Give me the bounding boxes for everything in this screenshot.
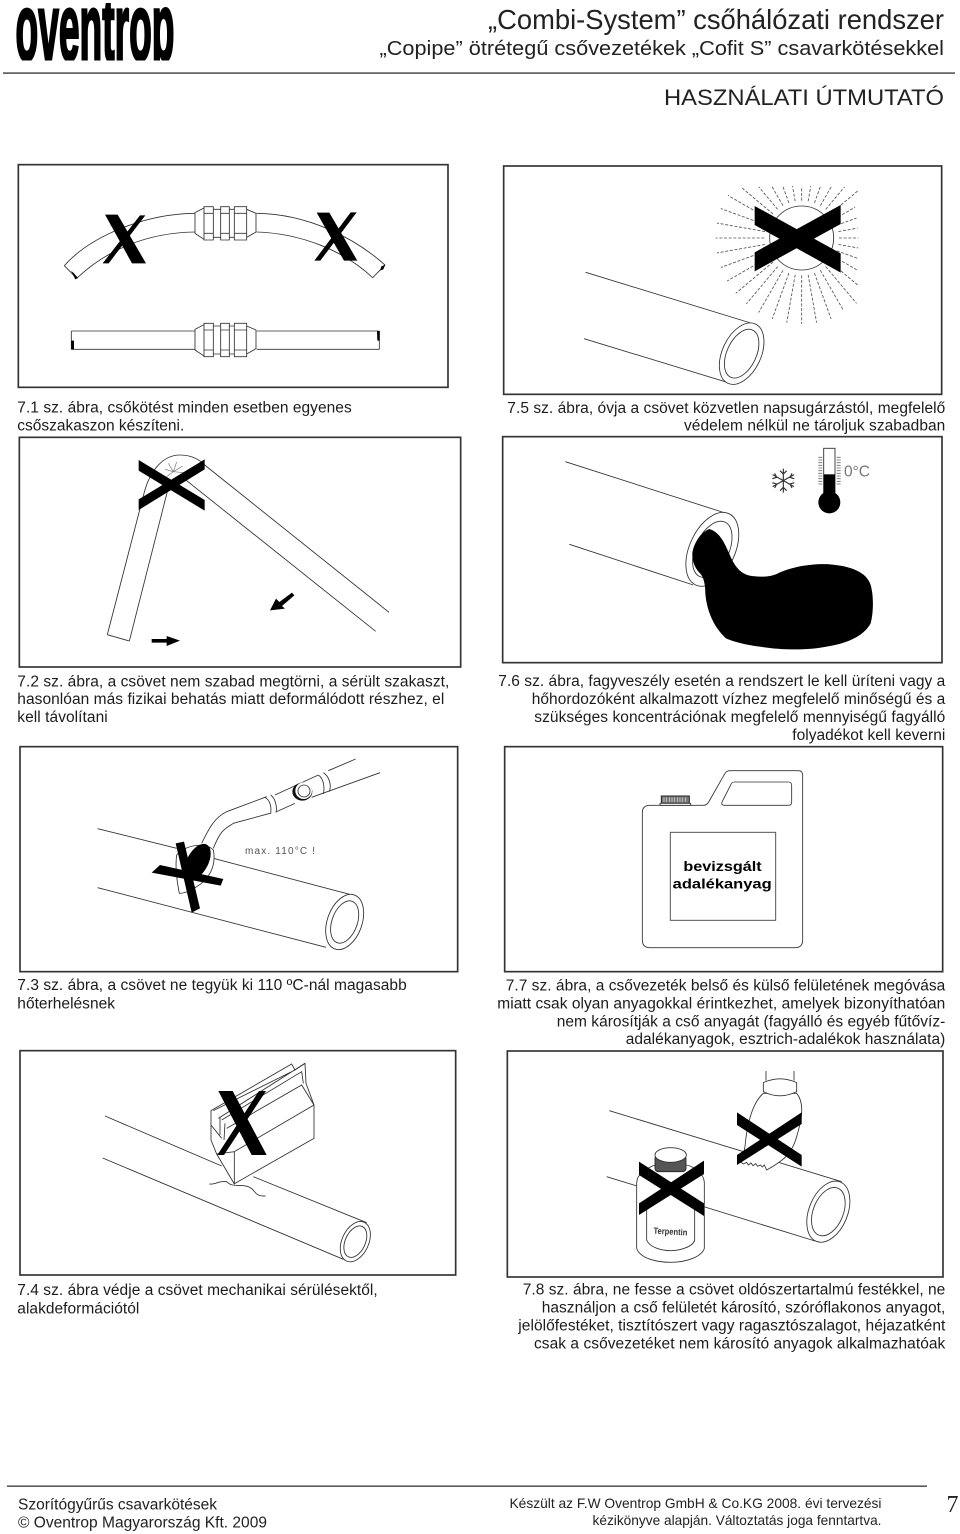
caption 7.8: csak a csővezetéket nem károsító anyagok alkalmazhatóak	[534, 1335, 946, 1352]
caption 7.2: hasonlóan más fizikai behatás miatt deformálódott részhez, el	[17, 691, 444, 708]
caption 7.1: csőszakaszon készíteni.	[17, 418, 184, 434]
caption 7.6: 7.6 sz. ábra, fagyveszély esetén a rendszert le kell üríteni vagy a	[498, 673, 946, 690]
X mark left	[103, 215, 146, 263]
caption 7.5: 7.5 sz. ábra, óvja a csövet közvetlen napsugárzástól, megfelelő	[507, 400, 945, 417]
pipe	[607, 1111, 858, 1249]
caption 7.3: hőterhelésnek	[17, 995, 115, 1012]
caption 7.3: 7.3 sz. ábra, a csövet ne tegyük ki 110 ºC-nál magasabb	[17, 977, 407, 994]
turpentine bottle: Terpentin	[653, 1226, 688, 1237]
caption 7.4: alakdeformációtól	[17, 1300, 139, 1317]
kinked pipe	[107, 455, 389, 641]
caption 7.8: 7.8 sz. ábra, ne fesse a csövet oldószertartalmú festékkel, ne	[523, 1282, 945, 1299]
caption 7.8: jelölőfestéket, tisztítószert vagy ragasztószalagot, héjazatként	[517, 1318, 946, 1335]
main pipe	[98, 829, 371, 955]
X mark on spray can	[737, 1112, 802, 1167]
canister	[642, 771, 803, 948]
weld outline and flame blob	[176, 840, 216, 893]
panel: 7.6 frost	[503, 437, 942, 663]
arrow down-left	[270, 593, 294, 610]
0°C label: 0°C	[844, 464, 870, 481]
X mark	[755, 205, 841, 273]
caption 7.6	[498, 673, 946, 744]
turpentine bottle	[637, 1148, 704, 1262]
footer right text: Készült az F.W Oventrop GmbH & Co.KG 2008. évi tervezési	[510, 1495, 882, 1511]
panel: 7.8 solvents	[507, 1051, 943, 1277]
caption 7.7: nem károsítják a cső anyagát (fagyálló és egyéb fűtővíz-	[557, 1014, 945, 1031]
footer left text	[18, 1496, 267, 1532]
caption 7.7: adalékanyagok, esztrich-adalékok használata)	[626, 1031, 945, 1048]
caption 7.6: folyadékot kell keverni	[792, 727, 945, 744]
caption 7.2: 7.2 sz. ábra, a csövet nem szabad megtörni, a sérült szakaszt,	[17, 673, 449, 690]
section heading: HASZNÁLATI ÚTMUTATÓ	[664, 85, 944, 110]
spray can	[738, 1071, 802, 1170]
canister handle opening	[722, 782, 792, 805]
panel: 7.1 pipe connection on straight section	[18, 165, 448, 387]
caption 7.6: szükséges koncentrációnak megfelelő mennyiségű fagyálló	[534, 709, 945, 726]
canister label	[670, 832, 776, 920]
X mark	[217, 1091, 267, 1155]
panel: 7.5 sunlight	[504, 166, 942, 394]
header title: „Combi-System” csőhálózati rendszer	[488, 4, 944, 35]
straight pipe with fitting	[71, 323, 380, 357]
caption 7.4	[17, 1282, 378, 1317]
caption 7.8: használjon a cső felületét károsító, szóróflakonos anyagot,	[542, 1300, 945, 1317]
caption 7.3	[17, 977, 407, 1012]
frozen water blob	[692, 529, 873, 649]
toolbox	[211, 1063, 314, 1184]
caption 7.7: miatt csak olyan anyagokkal érintkezhet, amelyek bizonyíthatóan	[497, 996, 945, 1013]
footer left text: Szorítógyűrűs csavarkötések	[18, 1496, 217, 1514]
caption 7.5: védelem nélkül ne tároljuk szabadban	[684, 418, 945, 435]
panel: 7.4 mechanical damage	[20, 1051, 456, 1275]
caption 7.1	[17, 399, 352, 434]
footer right text: kézikönyve alapján. Változtatás joga fenntartva.	[592, 1512, 882, 1528]
X mark	[139, 459, 205, 511]
X mark right	[314, 212, 357, 261]
caption 7.2	[17, 673, 449, 726]
caption 7.7	[497, 978, 946, 1048]
footer left text: © Oventrop Magyarország Kft. 2009	[18, 1514, 267, 1532]
bent small pipe	[202, 759, 380, 848]
sun with dashed rays	[716, 186, 858, 324]
caption 7.4: 7.4 sz. ábra védje a csövet mechanikai sérülésektől,	[17, 1282, 378, 1299]
pipe	[584, 272, 773, 391]
canister label: bevizsgált	[683, 858, 762, 874]
arrow right	[152, 636, 180, 646]
page number: 7	[946, 1492, 958, 1518]
icon: thermometer	[818, 448, 841, 513]
max temperature label: max. 110°C !	[245, 846, 315, 857]
panel: 7.2 kinked pipe	[19, 437, 461, 667]
header subtitle: „Copipe” ötrétegű csővezetékek „Cofit S” csavarkötésekkel	[380, 38, 944, 60]
X mark	[152, 842, 223, 913]
pipe	[565, 462, 749, 595]
icon: snowflake	[772, 469, 794, 493]
canister cap	[660, 796, 691, 805]
caption 7.7: 7.7 sz. ábra, a csővezeték belső és külső felületének megóvása	[506, 978, 946, 995]
panel: 7.3 heat load	[20, 747, 458, 972]
caption 7.8	[517, 1282, 946, 1352]
pipe	[103, 1116, 376, 1267]
footer right text	[510, 1495, 882, 1528]
caption 7.1: 7.1 sz. ábra, csőkötést minden esetben egyenes	[17, 399, 352, 416]
caption 7.5	[507, 400, 945, 435]
damage mark	[165, 462, 184, 477]
X mark on bottle	[639, 1161, 704, 1216]
curved pipe with fitting	[64, 207, 385, 279]
canister label: adalékanyag	[673, 875, 772, 891]
crack	[209, 1181, 266, 1196]
caption 7.2: kell távolítani	[17, 709, 108, 726]
caption 7.6: hőhordozóként alkalmazott vízhez megfelelő minőségű és a	[532, 691, 946, 708]
panel: 7.7 additive canister	[505, 747, 943, 972]
